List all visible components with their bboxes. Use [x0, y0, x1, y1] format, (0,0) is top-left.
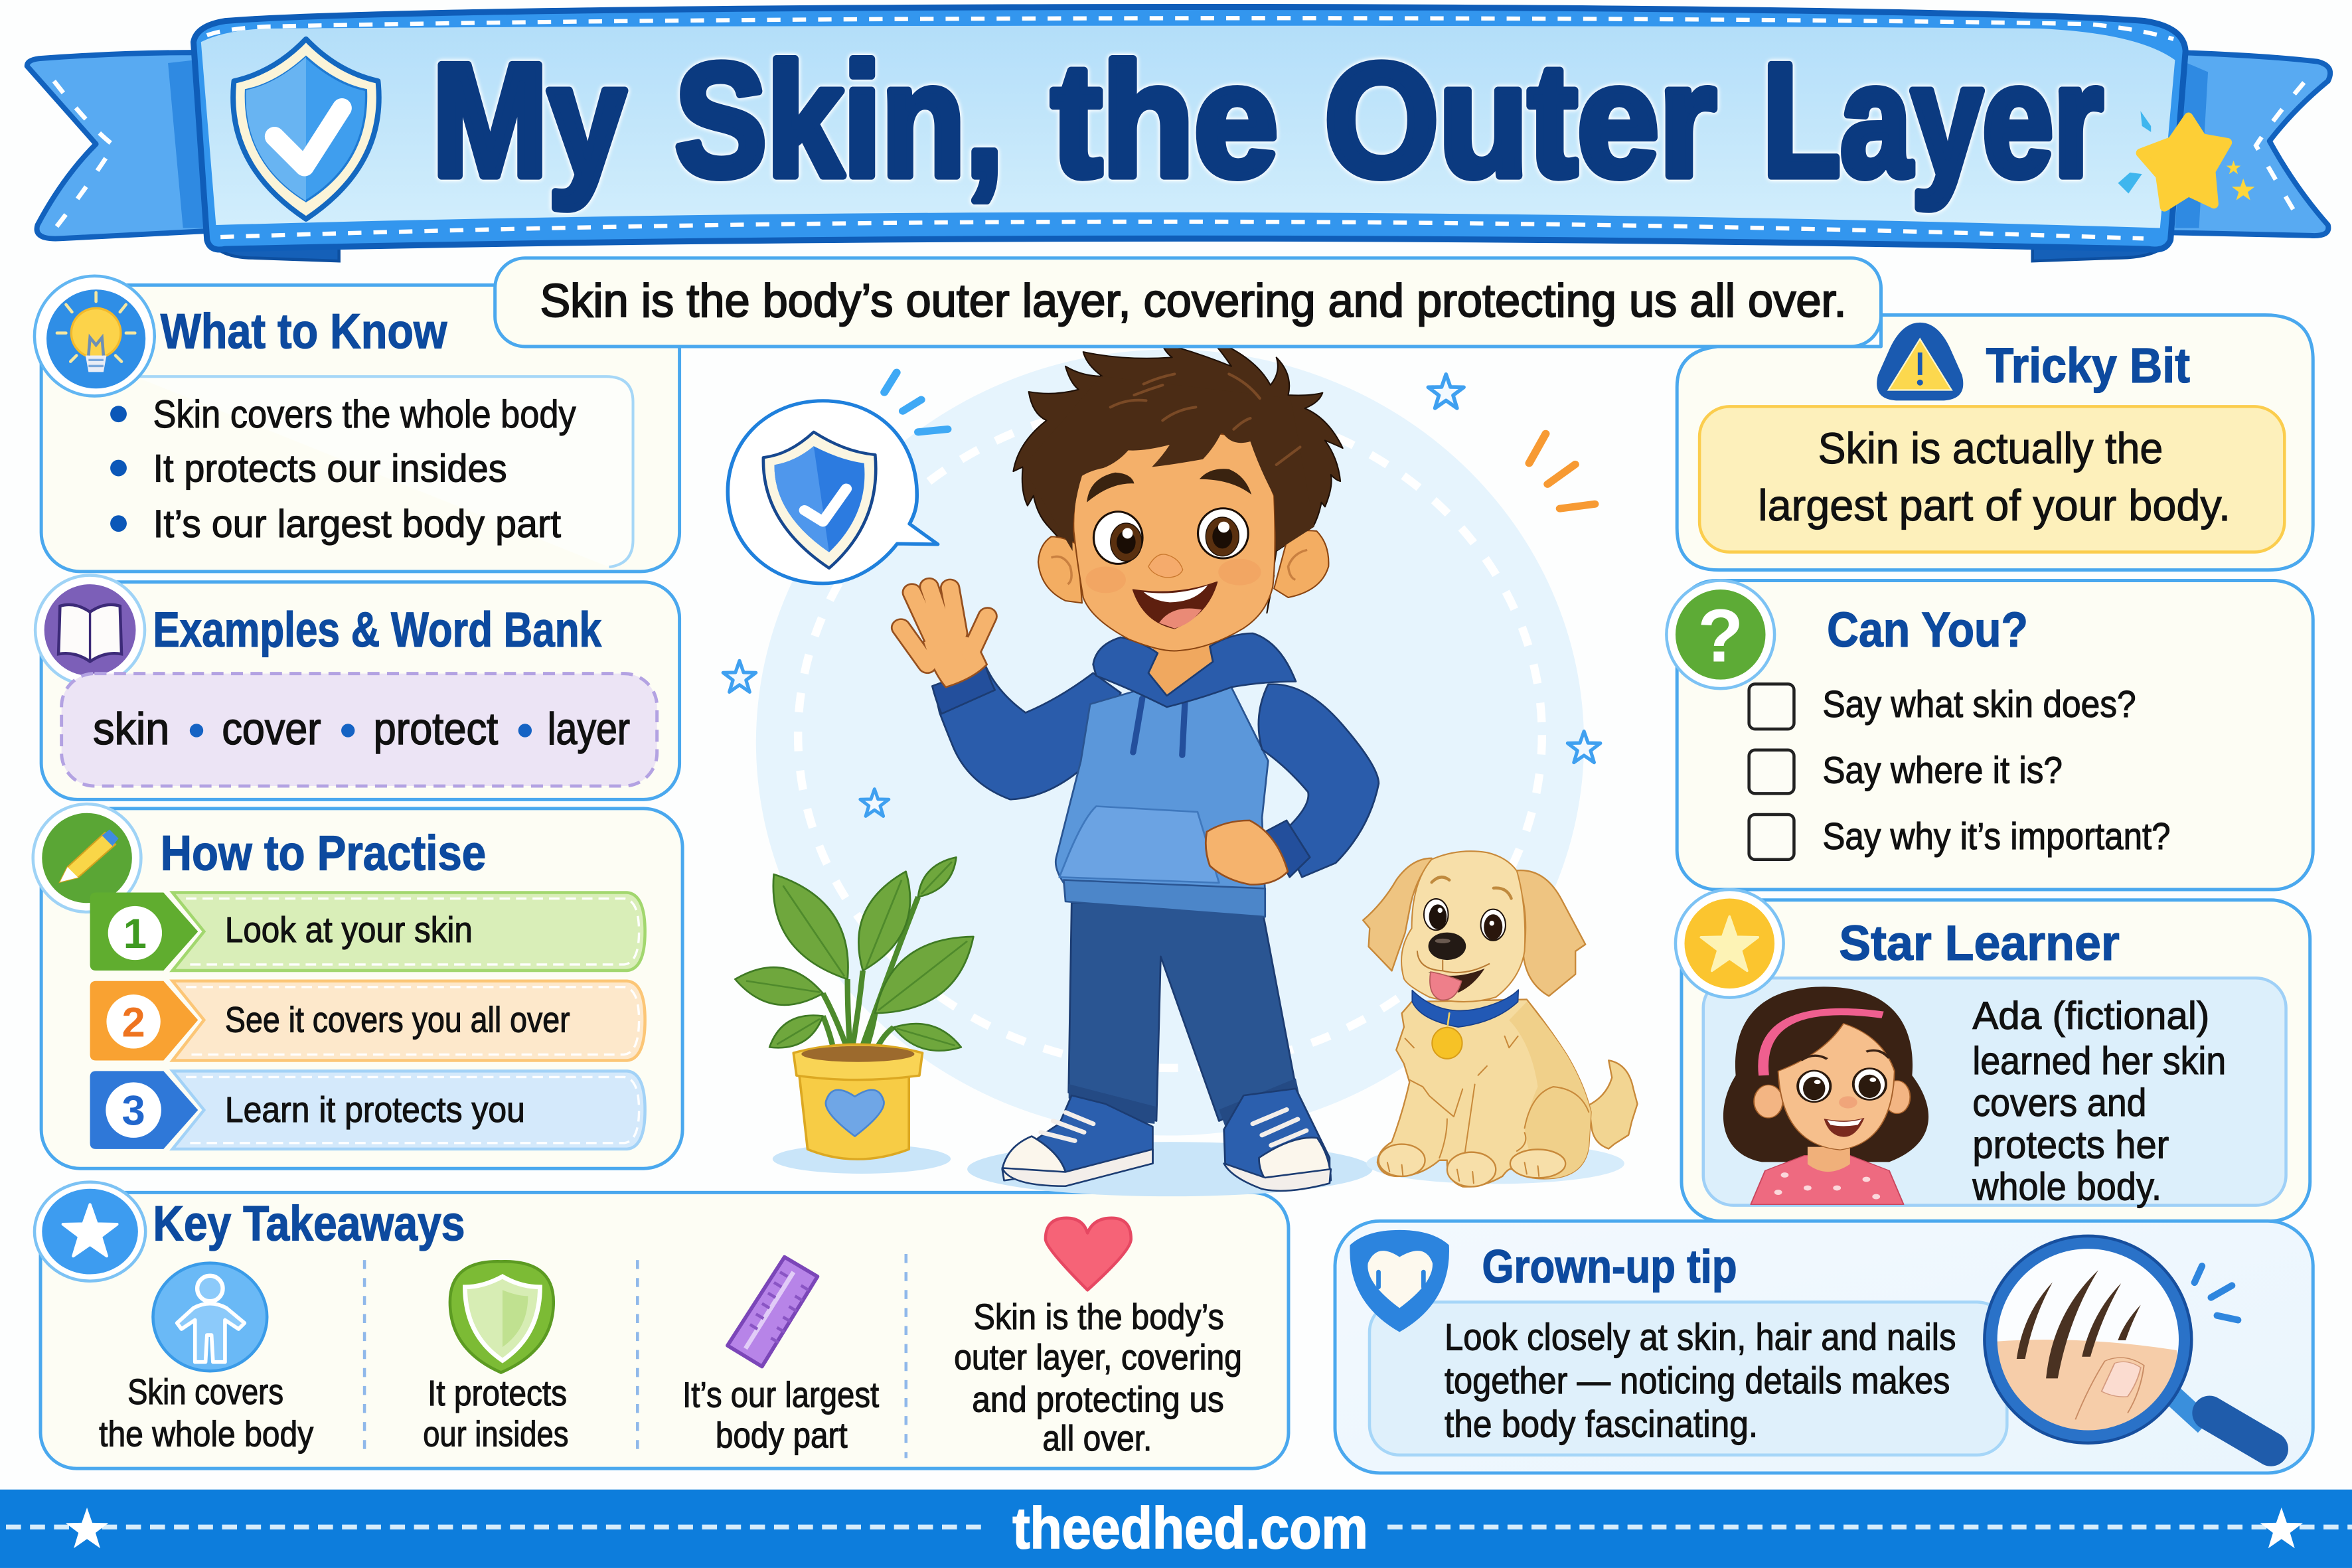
- illustration: plant: [735, 857, 973, 1159]
- bullet list: It’s our largest body part: [153, 503, 561, 546]
- tip text: [1445, 1316, 1956, 1445]
- step 1: [90, 892, 645, 971]
- heading: grown-up tip: Grown-up tip: [1482, 1241, 1737, 1293]
- boy torso hoodie: [1056, 633, 1296, 917]
- icon: heart shield: [1350, 1230, 1449, 1332]
- illustration: boy: [901, 339, 1379, 1191]
- icon: footer star right: [2260, 1508, 2303, 1548]
- tip inner box: [1370, 1302, 2007, 1455]
- icon: gold star: [1676, 890, 1784, 998]
- learner story: protects her: [1972, 1123, 2169, 1166]
- takeaway 3: It’s our largest: [682, 1375, 879, 1415]
- icon: heart: [1046, 1218, 1131, 1290]
- step 2: See it covers you all over: [225, 1000, 570, 1040]
- decorative stars and rays: [723, 374, 1601, 816]
- step 1: Look at your skin: [225, 910, 473, 950]
- tip text: together — noticing details makes: [1445, 1360, 1950, 1401]
- icon: book: [35, 576, 145, 685]
- takeaway 2: It protects: [428, 1373, 567, 1413]
- title text: the: [1052, 31, 1278, 210]
- ground shadows: [773, 1142, 1624, 1196]
- banner folds: [210, 234, 2169, 261]
- title text: [432, 31, 2103, 210]
- step 1: 1: [123, 911, 147, 957]
- title text: Outer: [1324, 31, 1716, 210]
- icon: light bulb: [35, 276, 155, 396]
- takeaway 1: [99, 1263, 313, 1454]
- checklist: [1749, 683, 2171, 860]
- learner story: whole body.: [1972, 1166, 2161, 1209]
- panel: star learner: [1676, 890, 2310, 1221]
- title text: My: [432, 31, 625, 210]
- takeaway 3: [682, 1257, 879, 1456]
- tricky bit note: largest part of your body.: [1758, 481, 2231, 530]
- tip text: Look closely at skin, hair and nails: [1445, 1316, 1956, 1358]
- panel: top definition callout: [495, 258, 1881, 347]
- icon: shield speech bubble: [728, 372, 947, 584]
- takeaway 2: [423, 1261, 568, 1454]
- heading: examples: Examples & Word Bank: [153, 602, 602, 657]
- banner body: [193, 7, 2185, 250]
- tricky bit note: Skin is actually the: [1818, 424, 2163, 473]
- icon: title shield: [233, 39, 379, 219]
- heading: tricky bit: Tricky Bit: [1986, 338, 2190, 393]
- icon: footer star left: [66, 1508, 108, 1548]
- tip text: the body fascinating.: [1445, 1403, 1758, 1445]
- icon: question mark: [1666, 580, 1774, 688]
- step 2: [90, 981, 645, 1061]
- footer bar: [0, 1490, 2352, 1568]
- checklist: Say where it is?: [1822, 749, 2063, 791]
- heading: key takeaways: Key Takeaways: [153, 1196, 465, 1251]
- takeaway 4: outer layer, covering: [954, 1338, 1242, 1377]
- learner story: learned her skin: [1972, 1040, 2226, 1083]
- icon: yellow star: [2118, 111, 2254, 207]
- title text: Skin,: [675, 31, 1004, 210]
- takeaway 1: Skin covers: [127, 1372, 283, 1412]
- icon: person: [153, 1263, 267, 1371]
- takeaway 2: our insides: [423, 1414, 568, 1454]
- title banner: [27, 7, 2330, 261]
- icon: question mark: ?: [1697, 594, 1743, 678]
- icon: green shield: [450, 1261, 554, 1373]
- footer website: theedhed.com: [1012, 1495, 1368, 1561]
- panel: examples and word bank: [35, 576, 680, 799]
- word bank box: protect: [374, 704, 498, 754]
- boy legs and shoes: [1002, 903, 1331, 1191]
- takeaway 4: all over.: [1042, 1419, 1152, 1458]
- panel: top definition callout: Skin is the body’s outer layer, covering and protecting us all over.: [540, 275, 1847, 327]
- checklist: Say why it’s important?: [1822, 815, 2171, 857]
- bullet list: It protects our insides: [153, 447, 507, 490]
- panel: key takeaways: [35, 1182, 1289, 1468]
- icon: magnifying glass: [1984, 1236, 2271, 1452]
- boy raised arm and hand: [901, 587, 1121, 799]
- panel: tricky bit: [1677, 315, 2313, 570]
- step 3: [90, 1071, 645, 1149]
- icon: ruler: [728, 1257, 817, 1367]
- learner story: [1972, 994, 2226, 1209]
- word bank box: cover: [222, 704, 321, 754]
- banner left tail: [27, 52, 207, 239]
- step 2: 2: [122, 999, 145, 1046]
- step 3: Learn it protects you: [225, 1090, 525, 1130]
- word bank box: skin: [93, 704, 169, 754]
- heading: what to know: What to Know: [161, 303, 447, 358]
- takeaway 1: the whole body: [99, 1414, 313, 1454]
- icon: warning triangle: [1877, 323, 1963, 400]
- heading: how to practise: How to Practise: [161, 826, 486, 881]
- bullet list: Skin covers the whole body: [153, 393, 576, 436]
- takeaway 4: Skin is the body’s: [973, 1297, 1224, 1337]
- centre background circle: [756, 350, 1584, 1136]
- panel: grown-up tip: [1335, 1221, 2313, 1473]
- panel: how to practise: [33, 804, 682, 1168]
- checklist: Say what skin does?: [1822, 683, 2136, 725]
- title text: Layer: [1763, 31, 2103, 210]
- panel: what to know: [35, 276, 680, 572]
- learner inner box: [1703, 978, 2286, 1206]
- takeaway 4: and protecting us: [972, 1379, 1224, 1419]
- panel: can you: [1666, 580, 2313, 890]
- icon: pencil: [33, 804, 141, 912]
- learner story: Ada (fictional): [1972, 994, 2209, 1038]
- boy right arm and hand: [1206, 684, 1379, 885]
- takeaway 3: body part: [716, 1416, 848, 1456]
- takeaway 4: [954, 1218, 1242, 1458]
- bullet list: [110, 393, 576, 546]
- illustration: girl: [1723, 986, 1928, 1204]
- learner story: covers and: [1972, 1081, 2146, 1125]
- tricky bit note: [1699, 406, 2284, 552]
- illustration: dog: [1363, 851, 1638, 1187]
- heading: star learner: Star Learner: [1839, 915, 2120, 971]
- banner right tail: [2169, 52, 2330, 236]
- word bank box: [62, 674, 657, 786]
- step 3: 3: [122, 1088, 145, 1135]
- icon: key star: [35, 1182, 145, 1281]
- word bank box: layer: [548, 704, 630, 754]
- heading: can you: Can You?: [1827, 602, 2028, 657]
- boy head: [1013, 339, 1343, 651]
